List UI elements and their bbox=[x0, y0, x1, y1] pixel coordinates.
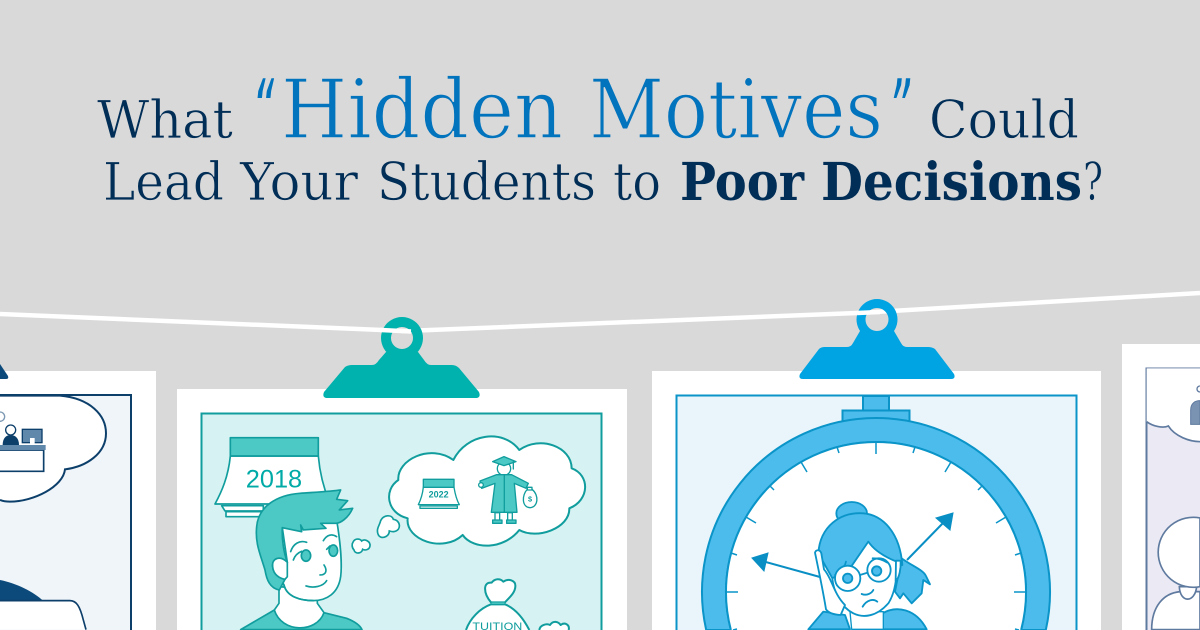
icon: small cloud bbox=[539, 622, 569, 630]
illustration: thought bubble with reception desk bbox=[0, 396, 106, 502]
string bbox=[0, 293, 1200, 331]
title: “ bbox=[252, 63, 274, 158]
illustration: 2018 calendar bbox=[215, 438, 330, 517]
title: Students bbox=[377, 153, 596, 213]
title: Poor bbox=[680, 152, 805, 213]
illustration: 2018 calendar: 2018 bbox=[246, 466, 302, 494]
icon: thought puffs bbox=[352, 516, 399, 553]
illustration: bubble and person bbox=[1147, 368, 1200, 630]
illustration: student face bbox=[241, 490, 362, 630]
icon: graduate with money bag: $ bbox=[528, 495, 532, 504]
title: Motives bbox=[589, 63, 883, 158]
title bbox=[97, 63, 1103, 213]
icon: graduate with money bag bbox=[479, 457, 537, 523]
title: What bbox=[97, 91, 233, 151]
illustration: person shoulder bbox=[0, 580, 86, 630]
panel: left card (cropped) bbox=[0, 371, 156, 630]
panel: right card (cropped) bbox=[1122, 344, 1200, 630]
clip: teal bbox=[323, 317, 480, 398]
arrow: right bbox=[907, 513, 953, 560]
thought bubble: graduation bbox=[389, 436, 585, 546]
title: ” bbox=[888, 63, 911, 158]
clip: blue bbox=[799, 299, 955, 379]
title: Decisions bbox=[821, 152, 1082, 213]
arrow: left bbox=[752, 553, 820, 577]
title: ? bbox=[1083, 153, 1103, 213]
clip: left (cropped) bbox=[0, 364, 8, 379]
panel: teal card bbox=[177, 389, 627, 630]
panel: blue card bbox=[652, 371, 1101, 630]
title: Hidden bbox=[281, 63, 563, 158]
clock ticks bbox=[726, 442, 1026, 630]
icon: 2022 calendar: 2022 bbox=[429, 490, 449, 500]
icon: 2022 calendar bbox=[418, 479, 459, 508]
illustration: worried student bbox=[808, 502, 930, 629]
icon: tuition money bag bbox=[466, 579, 569, 630]
title: to bbox=[613, 153, 661, 213]
title: Could bbox=[929, 91, 1079, 151]
title: Your bbox=[239, 153, 358, 213]
title: Lead bbox=[103, 153, 224, 213]
illustration: clock bbox=[702, 396, 1050, 630]
